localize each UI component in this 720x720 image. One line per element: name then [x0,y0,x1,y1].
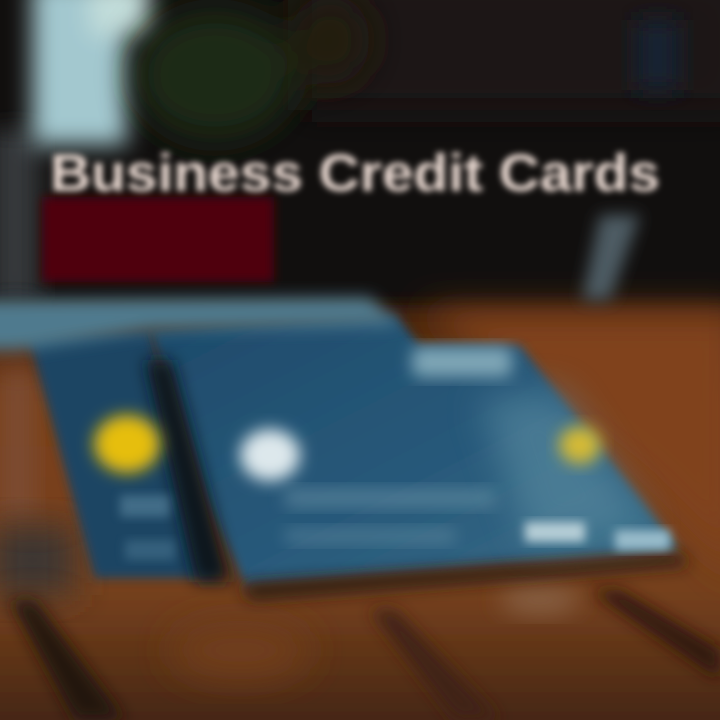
plant [135,0,370,140]
bright labels bottom right [525,522,585,542]
bottom shadow [240,554,690,600]
white chip centre [240,429,300,481]
card text band [285,488,495,508]
title: Business Credit Cards [50,144,660,203]
credit cards [0,297,690,600]
light patch top [412,347,512,377]
stem of stand at right [582,215,640,300]
icon: yellow chip left [94,415,160,473]
red block behind title [42,197,274,282]
left card text [120,495,170,517]
card: front [150,315,680,585]
light reflection area [480,390,650,545]
wooden table [0,305,720,720]
top edge highlight [0,297,400,350]
window light at top left [32,0,150,145]
gap shadow between cards [145,360,232,582]
icon: yellow chip right [559,426,601,464]
card: back left [28,330,215,578]
